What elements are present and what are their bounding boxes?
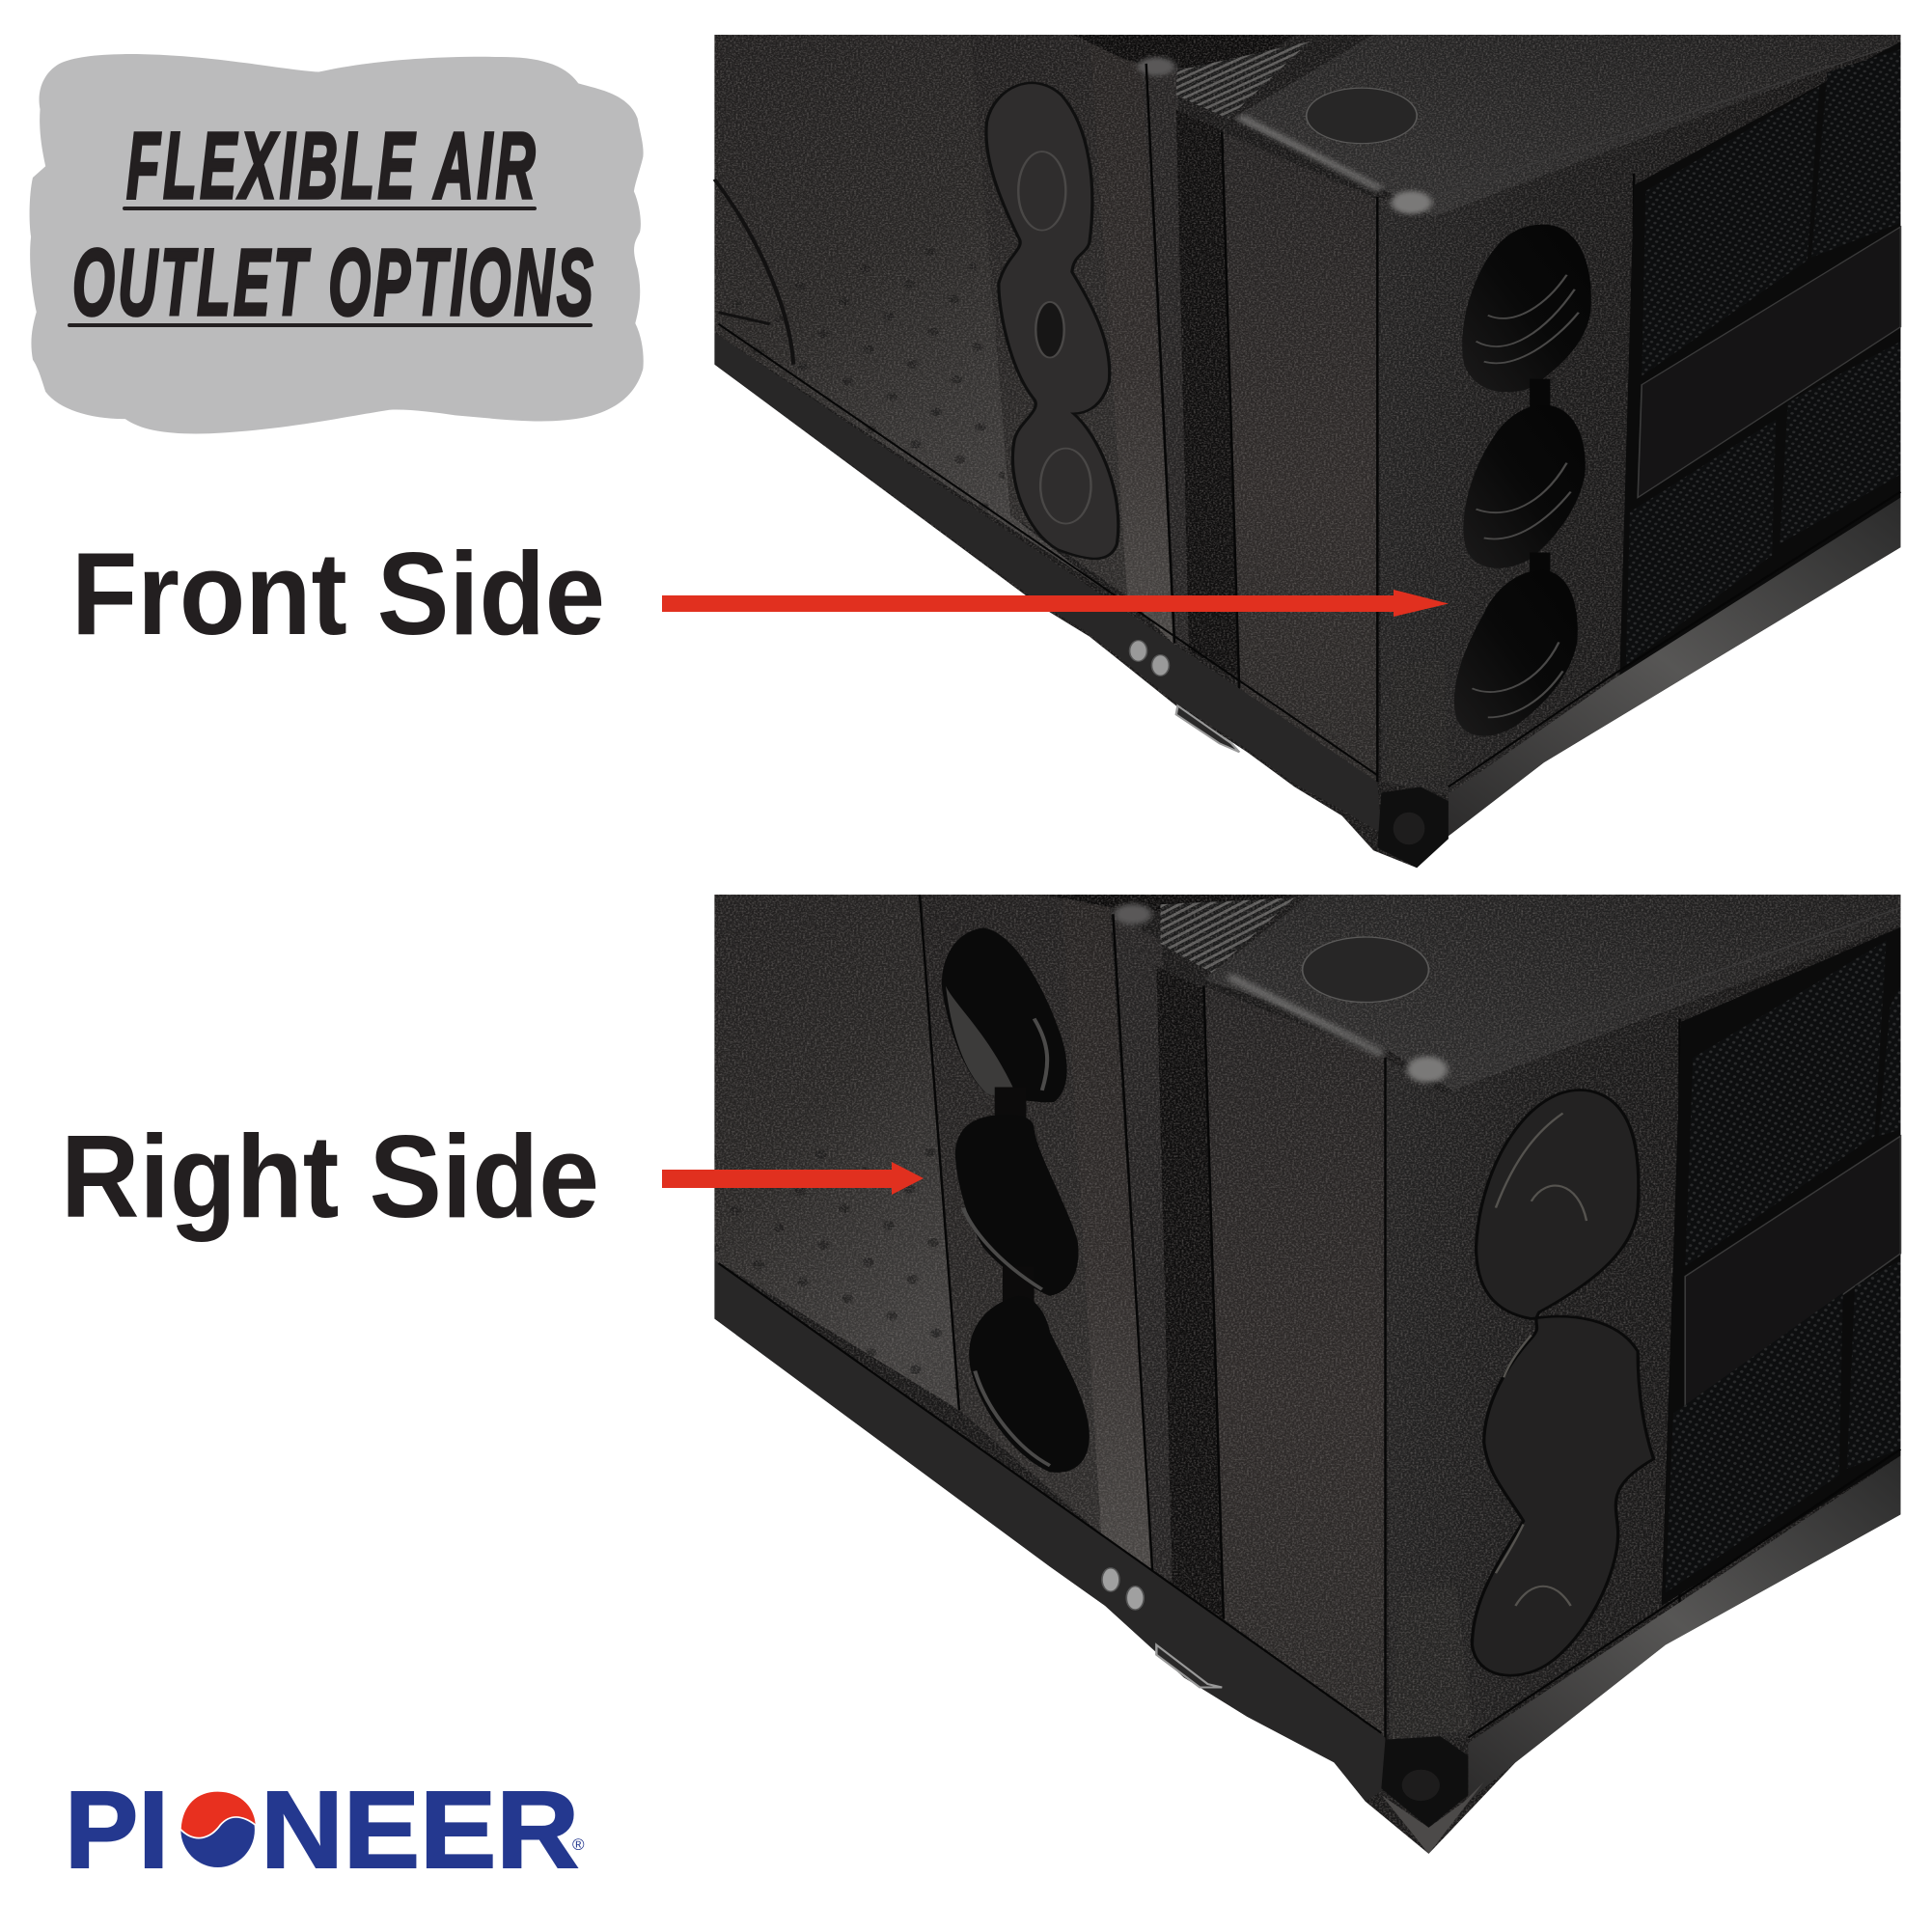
corner foot bbox=[1377, 787, 1449, 868]
panel: front side photo of unit packed in foam bbox=[714, 35, 1900, 868]
corner knob highlight bbox=[1391, 191, 1432, 214]
top recess circle bbox=[1303, 937, 1428, 1003]
logo text left: PI bbox=[65, 1769, 169, 1891]
foam body bbox=[714, 35, 1900, 868]
corner foot bbox=[1381, 1736, 1484, 1854]
edge lines bbox=[1146, 64, 1634, 783]
handle clip bbox=[1156, 1645, 1222, 1688]
left stencil mark bbox=[714, 179, 793, 365]
title line 1: FLEXIBLE AIR bbox=[126, 113, 538, 218]
title badge bbox=[30, 54, 644, 433]
knockout rings bbox=[1018, 152, 1090, 524]
three open air outlet holes bbox=[942, 928, 1090, 1473]
closed knockouts on right face bbox=[1472, 1090, 1654, 1675]
label: Right Side: Right Side bbox=[61, 1111, 599, 1242]
mesh air intake panels bbox=[1619, 41, 1900, 676]
top edge ridge highlight bbox=[1232, 979, 1380, 1053]
mesh air intake panels bbox=[1662, 927, 1900, 1606]
panel: right side photo of unit packed in foam bbox=[714, 895, 1900, 1854]
top edge ridge highlight bbox=[1243, 119, 1377, 188]
title line 2: OUTLET OPTIONS bbox=[72, 230, 596, 335]
three open air outlet holes bbox=[1454, 225, 1591, 736]
foam body bbox=[714, 895, 1900, 1854]
knockout rings and highlights bbox=[1496, 1114, 1587, 1606]
label: Front Side: Front Side bbox=[71, 528, 605, 659]
arrow: front side bbox=[662, 590, 1449, 617]
corner knob highlight bbox=[1407, 1057, 1448, 1083]
registered mark: ® bbox=[572, 1835, 585, 1854]
logo text right: NEER bbox=[261, 1769, 579, 1891]
badge shape: gray brush blob bbox=[30, 54, 644, 433]
title underline 2 bbox=[68, 323, 593, 327]
strap foam highlight bbox=[1114, 904, 1151, 925]
screws bbox=[1130, 641, 1169, 676]
base frame bbox=[714, 1260, 1900, 1802]
title underline 1 bbox=[123, 207, 537, 210]
screws bbox=[1102, 1568, 1144, 1610]
base frame bbox=[714, 324, 1900, 837]
strap foam highlight bbox=[1138, 57, 1175, 76]
handle clip bbox=[1176, 705, 1239, 752]
embossed knockouts on left panel bbox=[986, 83, 1118, 559]
arrow: right side bbox=[662, 1162, 924, 1195]
edge lines bbox=[920, 895, 1679, 1743]
logo: Pioneer bbox=[65, 1769, 585, 1891]
top recess circle bbox=[1307, 88, 1417, 144]
logo mark bbox=[180, 1792, 256, 1867]
